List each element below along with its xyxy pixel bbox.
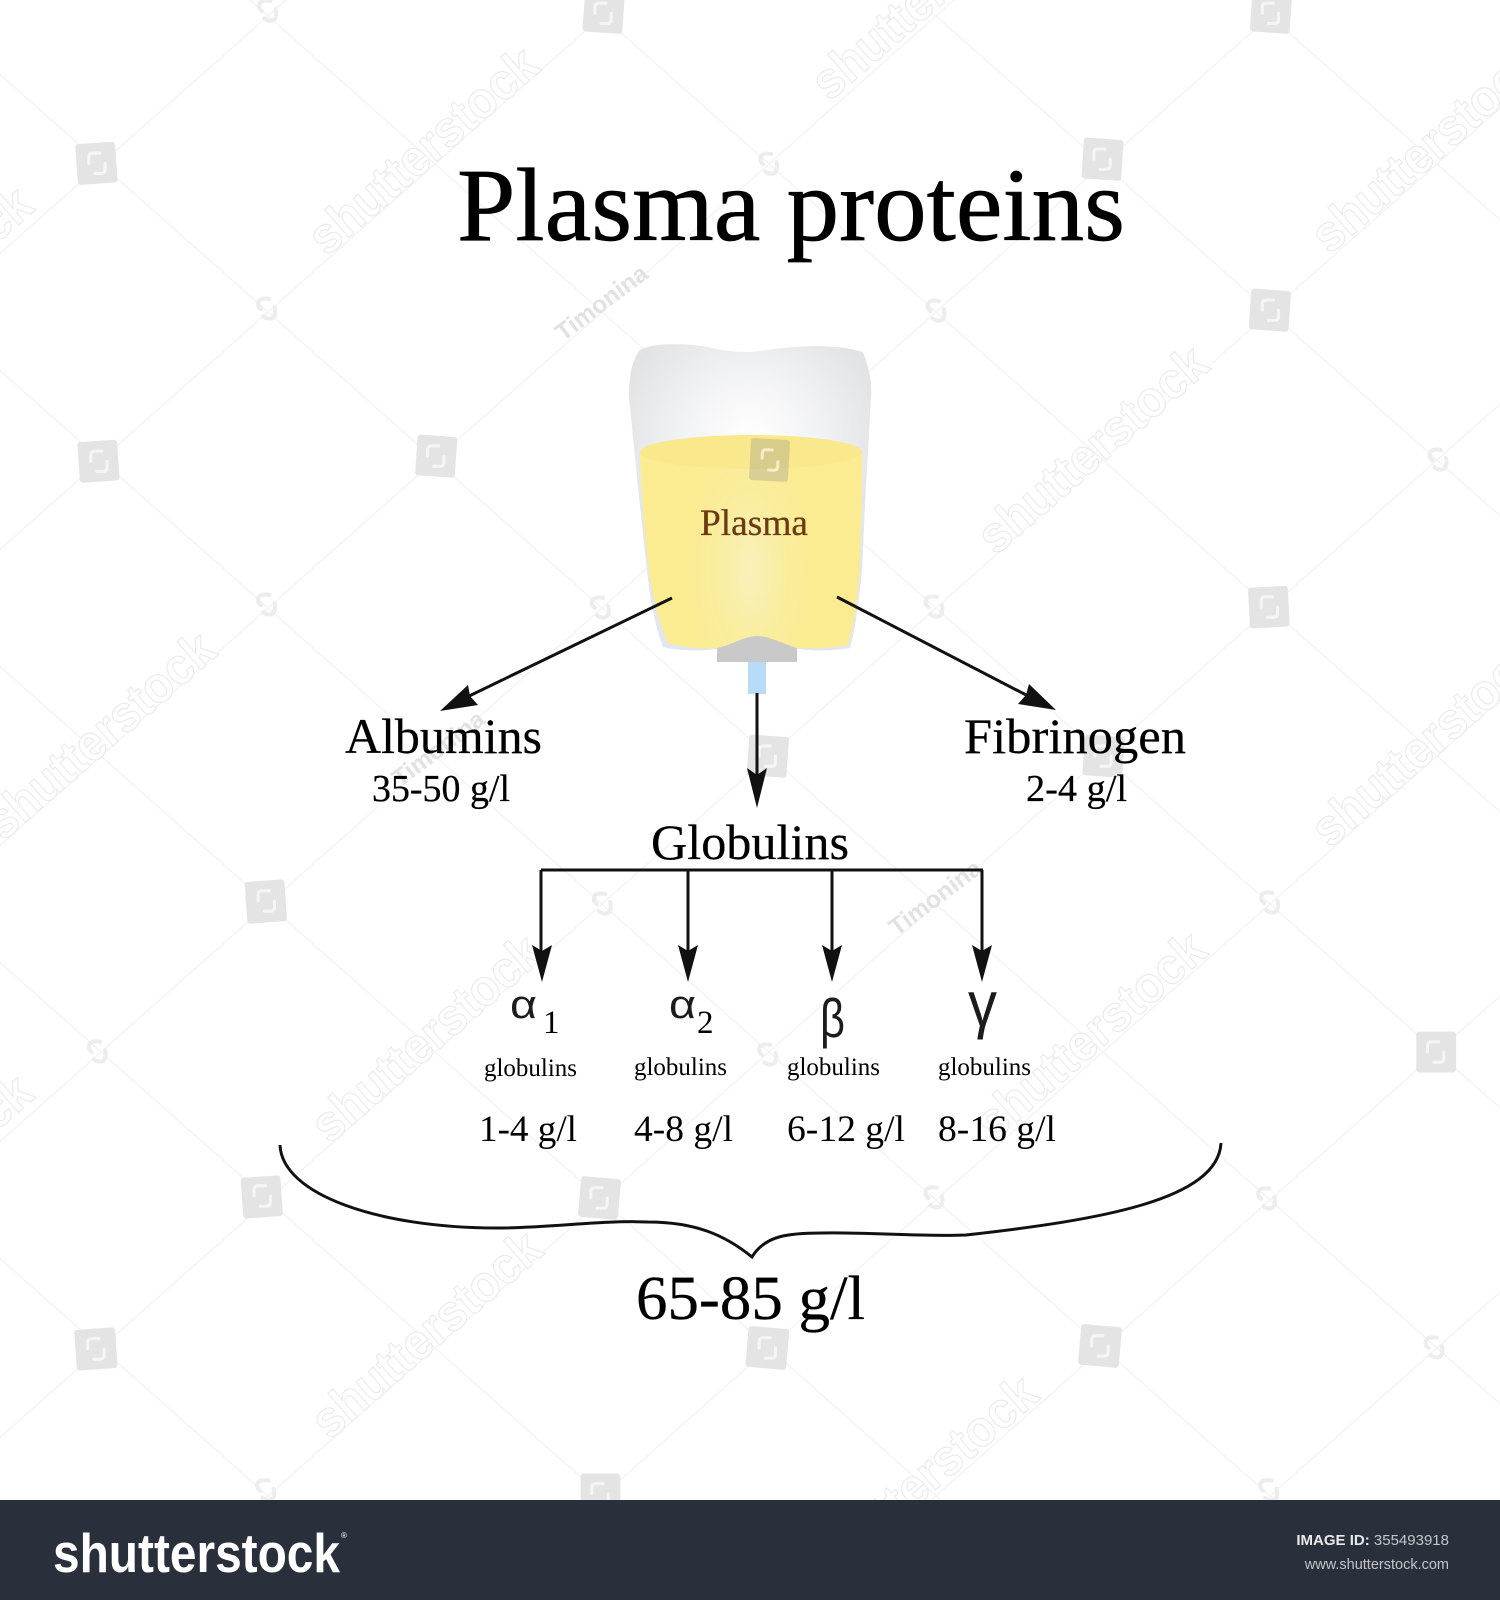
branching arrows to globulin fractions xyxy=(532,870,992,982)
watermark: tiled squares and logos: Timonina xyxy=(884,855,987,942)
fraction: beta globulins: 6-12 g/l xyxy=(787,1109,905,1150)
fraction: gamma globulins: γ xyxy=(968,968,997,1040)
curly brace xyxy=(280,1143,1221,1257)
fraction: alpha 2 globulins: 2 xyxy=(697,1005,714,1041)
bag cap xyxy=(717,636,797,662)
fraction: beta globulins: β xyxy=(820,987,845,1049)
title: Plasma proteins xyxy=(457,148,1125,263)
fraction: gamma globulins xyxy=(938,968,1056,1150)
bag label: Plasma xyxy=(700,503,808,544)
icon: plasma bag xyxy=(629,344,871,694)
watermark: tiled squares and logos: shutterstock xyxy=(296,35,550,265)
watermark: tiled squares and logos: shutterstock xyxy=(299,922,553,1153)
liquid surface xyxy=(640,435,862,469)
watermark: tiled squares and logos: shutterstock xyxy=(299,1218,553,1449)
fraction: beta globulins: globulins xyxy=(787,1054,880,1081)
label: fibrinogen: 2-4 g/l xyxy=(1026,768,1127,810)
fraction: beta globulins xyxy=(787,987,905,1150)
registered mark: ® xyxy=(341,1531,347,1540)
blue tube xyxy=(748,662,766,694)
fraction: alpha 2 globulins: globulins xyxy=(634,1054,727,1081)
total range: 65-85 g/l xyxy=(636,1265,865,1333)
arrow: plasma to albumins xyxy=(440,598,672,711)
fraction: alpha 1 globulins: α xyxy=(510,983,537,1027)
watermark: tiled squares and logos: shutterstock xyxy=(795,1363,1049,1594)
label: albumins: 35-50 g/l xyxy=(372,768,510,810)
translucent watermark tile on bag xyxy=(749,438,790,482)
arrow: plasma to fibrinogen xyxy=(837,597,1056,710)
label: fibrinogen xyxy=(964,708,1186,810)
bag body xyxy=(629,344,871,650)
label: fibrinogen: Fibrinogen xyxy=(964,708,1186,764)
footer logo: shutterstock xyxy=(53,1522,340,1584)
watermark: tiled squares and logos: Timonina xyxy=(551,260,654,347)
fraction: gamma globulins: globulins xyxy=(938,1054,1031,1081)
image id: IMAGE ID: 355493918 xyxy=(1296,1532,1449,1549)
fraction: alpha 1 globulins xyxy=(479,983,577,1150)
watermark: tiled squares and logos: shutterstock xyxy=(966,334,1219,564)
fraction: alpha 1 globulins: 1 xyxy=(543,1005,560,1041)
label: albumins xyxy=(345,708,542,810)
watermark: tiled squares and logos: Timonina xyxy=(387,706,490,793)
fraction: gamma globulins: 8-16 g/l xyxy=(938,1109,1056,1150)
fraction: alpha 2 globulins xyxy=(634,983,733,1150)
label: globulins: Globulins xyxy=(651,814,849,870)
lower bag edge xyxy=(638,487,865,650)
footer bar xyxy=(0,1500,1500,1600)
fraction: alpha 1 globulins: 1-4 g/l xyxy=(479,1109,577,1150)
watermark: tiled squares and logos: shutterstock xyxy=(964,919,1217,1150)
arrow: plasma to globulins xyxy=(747,693,767,808)
fraction: alpha 1 globulins: globulins xyxy=(484,1055,577,1082)
plasma liquid xyxy=(640,444,862,648)
fraction: alpha 2 globulins: α xyxy=(669,983,696,1027)
website: www.shutterstock.com xyxy=(1304,1557,1449,1573)
label: albumins: Albumins xyxy=(345,708,542,764)
fraction: alpha 2 globulins: 4-8 g/l xyxy=(634,1109,733,1150)
